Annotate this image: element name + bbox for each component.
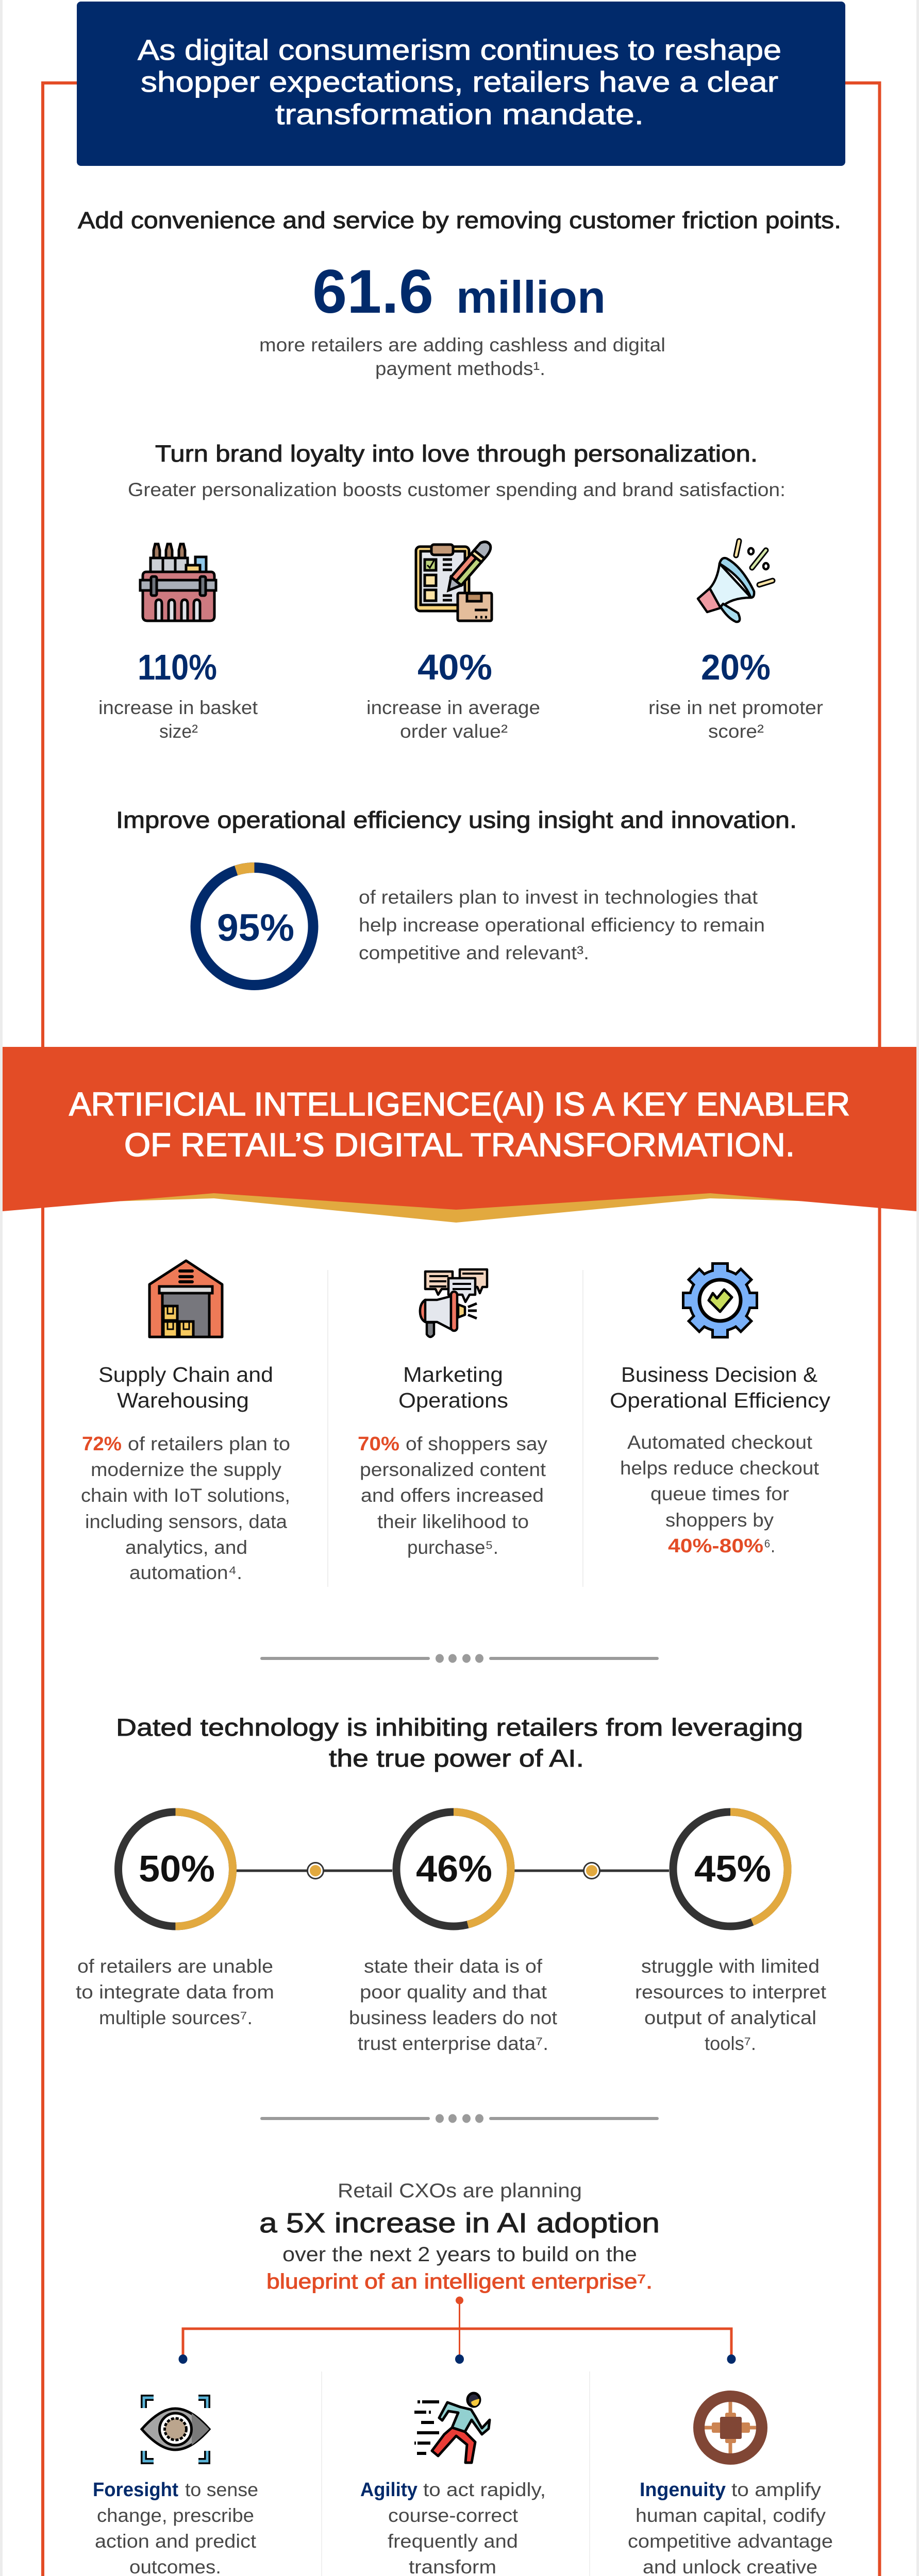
icon: runner: [414, 2393, 490, 2463]
text: Foresight: [93, 2479, 178, 2501]
callout: 5X increase in AI adoption: [259, 2180, 660, 2293]
connector line: [237, 1863, 669, 1878]
icon: basket: [140, 544, 216, 621]
ring description: 46%: poor quality and that: [360, 1981, 547, 2003]
callout: 5X increase in AI adoption: a 5X increase in AI adoption: [259, 2208, 660, 2239]
section: personalization: [98, 440, 823, 742]
ring description: 45%: [635, 1956, 827, 2054]
text: [93, 2479, 258, 2576]
stat: 61.6 million: 61.6: [312, 257, 433, 326]
stat description: [259, 334, 665, 379]
ring description: 46%: business leaders do not: [349, 2007, 558, 2028]
heading: dated technology: the true power of AI.: [329, 1744, 584, 1772]
text: to amplify: [731, 2479, 822, 2500]
text: change, prescribe: [97, 2505, 254, 2526]
section: convenience: [78, 207, 841, 379]
title: Business Decision &: [621, 1363, 817, 1386]
donut description: competitive and relevant³.: [359, 942, 589, 963]
text: [628, 2479, 833, 2576]
body text: [620, 1432, 820, 1557]
ring description: 46%: [349, 1956, 558, 2054]
title: [98, 1363, 273, 1412]
stat: 20%: score²: [708, 721, 764, 742]
stat description: payment methods¹.: [375, 358, 545, 379]
chart: connected percentage rings: [119, 1812, 788, 1926]
ring: 46%: 46%: [416, 1849, 492, 1890]
body text: of retailers plan to: [128, 1433, 290, 1454]
ring: 50%: [119, 1812, 233, 1926]
ring description: 45%: output of analytical: [644, 2007, 816, 2028]
title: [398, 1363, 508, 1412]
header banner: transformation mandate.: [275, 98, 644, 130]
title: Operations: [398, 1388, 508, 1412]
heading: convenience: Add convenience and service by removing customer friction points.: [78, 207, 841, 233]
heading: dated technology: Dated technology is inhibiting retailers from leveraging: [116, 1714, 803, 1741]
icon: gear: [684, 1265, 756, 1336]
body text: [81, 1433, 290, 1583]
section: operational efficiency: [116, 807, 797, 1001]
donut chart: 95%: [180, 852, 328, 1001]
text: Agility: [360, 2479, 417, 2501]
ring description: 46%: trust enterprise data⁷.: [358, 2033, 548, 2054]
text: action and predict: [95, 2531, 257, 2552]
body text: their likelihood to: [377, 1511, 529, 1532]
ring description: 46%: state their data is of: [364, 1956, 543, 1977]
banner: AI key enabler: [3, 1047, 916, 1223]
body text: personalized content: [360, 1459, 546, 1480]
text: Ingenuity: [640, 2479, 726, 2501]
stat: 20%: [648, 647, 823, 742]
icon: megaphone: [698, 541, 773, 622]
icon: marketing megaphone: [420, 1269, 487, 1337]
icon: warehouse: [149, 1261, 222, 1337]
icon: wheel: [699, 2396, 762, 2459]
stat: 40%: order value²: [400, 721, 508, 742]
tree connector: [178, 2297, 736, 2364]
callout: 5X increase in AI adoption: blueprint of an intelligent enterprise⁷.: [266, 2269, 653, 2293]
body text: of shoppers say: [406, 1433, 548, 1454]
stat: 61.6 million: million: [456, 272, 606, 323]
stat: 110%: 110%: [138, 647, 217, 687]
body text: 70%: [358, 1433, 399, 1455]
stat: 20%: rise in net promoter: [648, 697, 823, 718]
ring: 45%: [673, 1812, 788, 1926]
donut description: [359, 887, 765, 963]
banner: AI key enabler: ARTIFICIAL INTELLIGENCE(AI) IS A KEY ENABLER: [69, 1086, 850, 1123]
panel: agility: [360, 2393, 546, 2576]
text: course-correct: [388, 2505, 519, 2526]
title: Warehousing: [117, 1388, 249, 1412]
body text: queue times for: [650, 1483, 789, 1504]
body text: Automated checkout: [627, 1432, 813, 1453]
ring: 50%: 50%: [139, 1849, 215, 1890]
callout: 5X increase in AI adoption: Retail CXOs are planning: [338, 2180, 582, 2202]
banner: AI key enabler: OF RETAIL’S DIGITAL TRANSFORMATION.: [124, 1126, 795, 1163]
body text: including sensors, data: [85, 1511, 287, 1532]
donut description: help increase operational efficiency to remain: [359, 914, 765, 936]
title: Marketing: [403, 1363, 503, 1386]
donut chart: 95%: 95%: [217, 906, 294, 949]
body text: analytics, and: [125, 1537, 247, 1558]
body text: ⁶.: [764, 1535, 775, 1556]
body text: automation⁴.: [129, 1562, 242, 1583]
body text: helps reduce checkout: [620, 1458, 820, 1479]
stat: 110%: size²: [159, 721, 198, 742]
divider: [260, 1654, 659, 1663]
heading: dated technology: [116, 1714, 803, 1772]
ring description: 50%: to integrate data from: [76, 1981, 274, 2003]
stat: 61.6 million: [312, 257, 606, 326]
donut description: of retailers plan to invest in technologies that: [359, 887, 758, 908]
stat: 110%: [98, 647, 258, 742]
ring description: 45%: tools⁷.: [705, 2033, 756, 2054]
body text: and offers increased: [361, 1485, 544, 1506]
heading: efficiency: Improve operational efficiency using insight and innovation.: [116, 807, 797, 833]
header banner: shopper expectations, retailers have a clear: [141, 65, 778, 98]
stat: 20%: 20%: [701, 647, 771, 687]
body text: modernize the supply: [91, 1459, 282, 1480]
panel: business decision: [610, 1265, 831, 1557]
header banner: [77, 2, 845, 166]
ring: 46%: [396, 1812, 511, 1926]
text: frequently and: [388, 2531, 518, 2552]
ring description: 45%: struggle with limited: [641, 1956, 820, 1977]
body text: purchase⁵.: [407, 1537, 498, 1558]
ring: 45%: 45%: [694, 1849, 771, 1890]
body text: 40%-80%: [668, 1535, 763, 1557]
body text: shoppers by: [665, 1510, 774, 1531]
heading: personalization: Turn brand loyalty into love through personalization.: [155, 440, 758, 467]
stat: 40%: 40%: [417, 647, 492, 687]
stat: 40%: [366, 647, 540, 742]
ring description: 45%: resources to interpret: [635, 1981, 827, 2003]
body text: chain with IoT solutions,: [81, 1485, 290, 1506]
icon: clipboard: [416, 542, 492, 621]
stat: 40%: increase in average: [366, 697, 540, 718]
divider: [260, 2114, 659, 2123]
text: human capital, codify: [636, 2505, 826, 2526]
text: to sense: [185, 2479, 258, 2500]
panel: supply chain: [81, 1261, 290, 1583]
text: [360, 2479, 546, 2576]
title: [610, 1363, 831, 1412]
title: Supply Chain and: [98, 1363, 273, 1386]
ring description: 50%: multiple sources⁷.: [99, 2007, 253, 2028]
ring description: 50%: [76, 1956, 274, 2028]
text: to act rapidly,: [423, 2479, 546, 2500]
icon: eye: [142, 2398, 209, 2461]
body text: [358, 1433, 548, 1558]
subheading: Greater personalization boosts customer spending and brand satisfaction:: [128, 479, 786, 500]
callout: 5X increase in AI adoption: over the next 2 years to build on the: [282, 2243, 637, 2266]
text: competitive advantage: [628, 2531, 833, 2552]
panel: marketing: [358, 1269, 548, 1558]
panel: foresight: [93, 2398, 258, 2576]
header banner: As digital consumerism continues to reshape: [138, 33, 781, 66]
panel: ingenuity: [628, 2396, 833, 2576]
stat description: more retailers are adding cashless and digital: [259, 334, 665, 355]
stat: 110%: increase in basket: [98, 697, 258, 718]
title: Operational Efficiency: [610, 1388, 831, 1412]
body text: 72%: [82, 1433, 122, 1455]
ring description: 50%: of retailers are unable: [77, 1956, 273, 1977]
